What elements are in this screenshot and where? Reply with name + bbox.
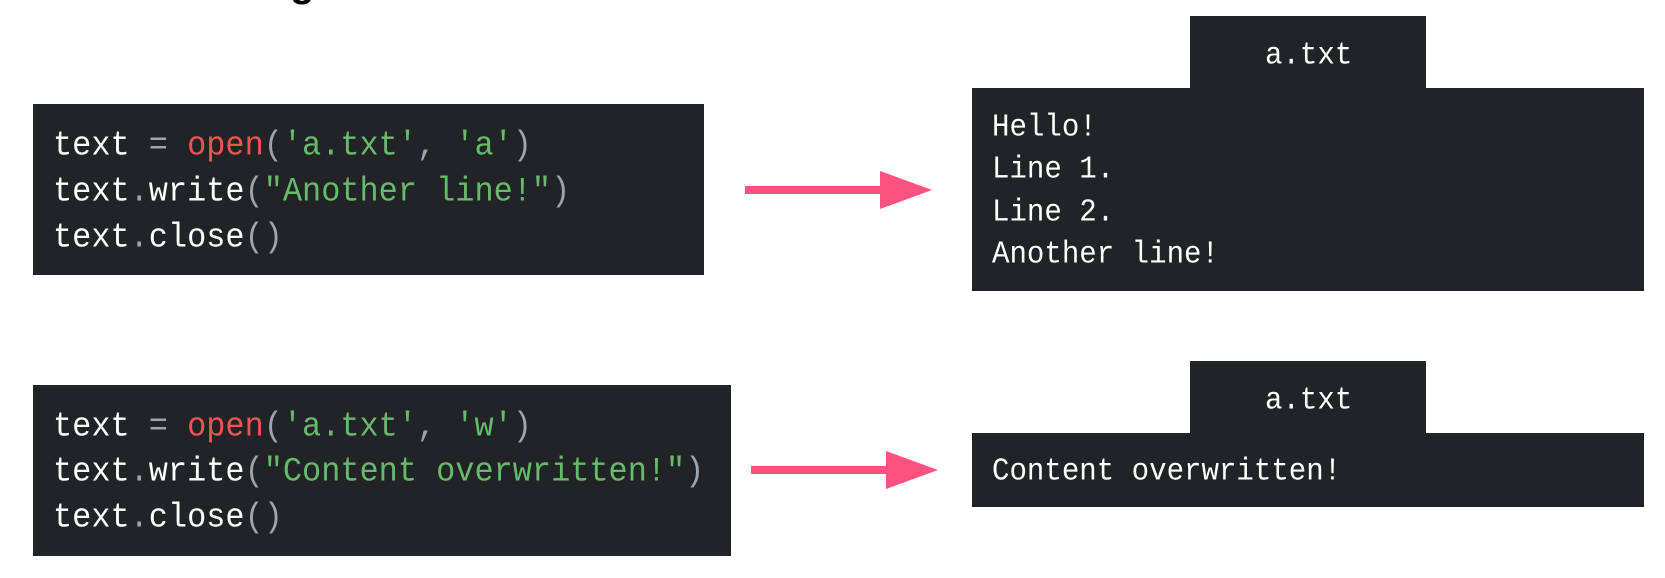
panel: appended file: [972, 16, 1644, 291]
code line: write: text.write("Another line!"): [53, 172, 570, 211]
file body: [972, 88, 1644, 291]
file line 4: Another line!: [992, 237, 1219, 272]
arrow: append result: [745, 171, 932, 209]
file line 3: Line 2.: [992, 195, 1114, 230]
file name: a.txt: [1265, 38, 1352, 73]
file line 1: Hello!: [992, 110, 1097, 145]
file tab: [1190, 361, 1426, 434]
code line: open append: text = open('a.txt', 'a'): [53, 126, 532, 165]
panel: overwritten file: [972, 361, 1644, 507]
panel: write code: [33, 385, 730, 556]
file tab: [1190, 16, 1426, 89]
code line: open write: text = open('a.txt', 'w'): [53, 406, 532, 446]
code line: close: text.close(): [53, 498, 283, 537]
file line 2: Line 1.: [992, 152, 1114, 187]
panel: append code: [33, 104, 704, 275]
code line: close: text.close(): [53, 218, 283, 257]
file body: [972, 433, 1644, 507]
file name: a.txt: [1265, 383, 1352, 418]
code line: write: text.write("Content overwritten!"): [53, 452, 704, 491]
file line: Content overwritten!: [992, 454, 1341, 489]
arrow: write result: [751, 451, 938, 489]
